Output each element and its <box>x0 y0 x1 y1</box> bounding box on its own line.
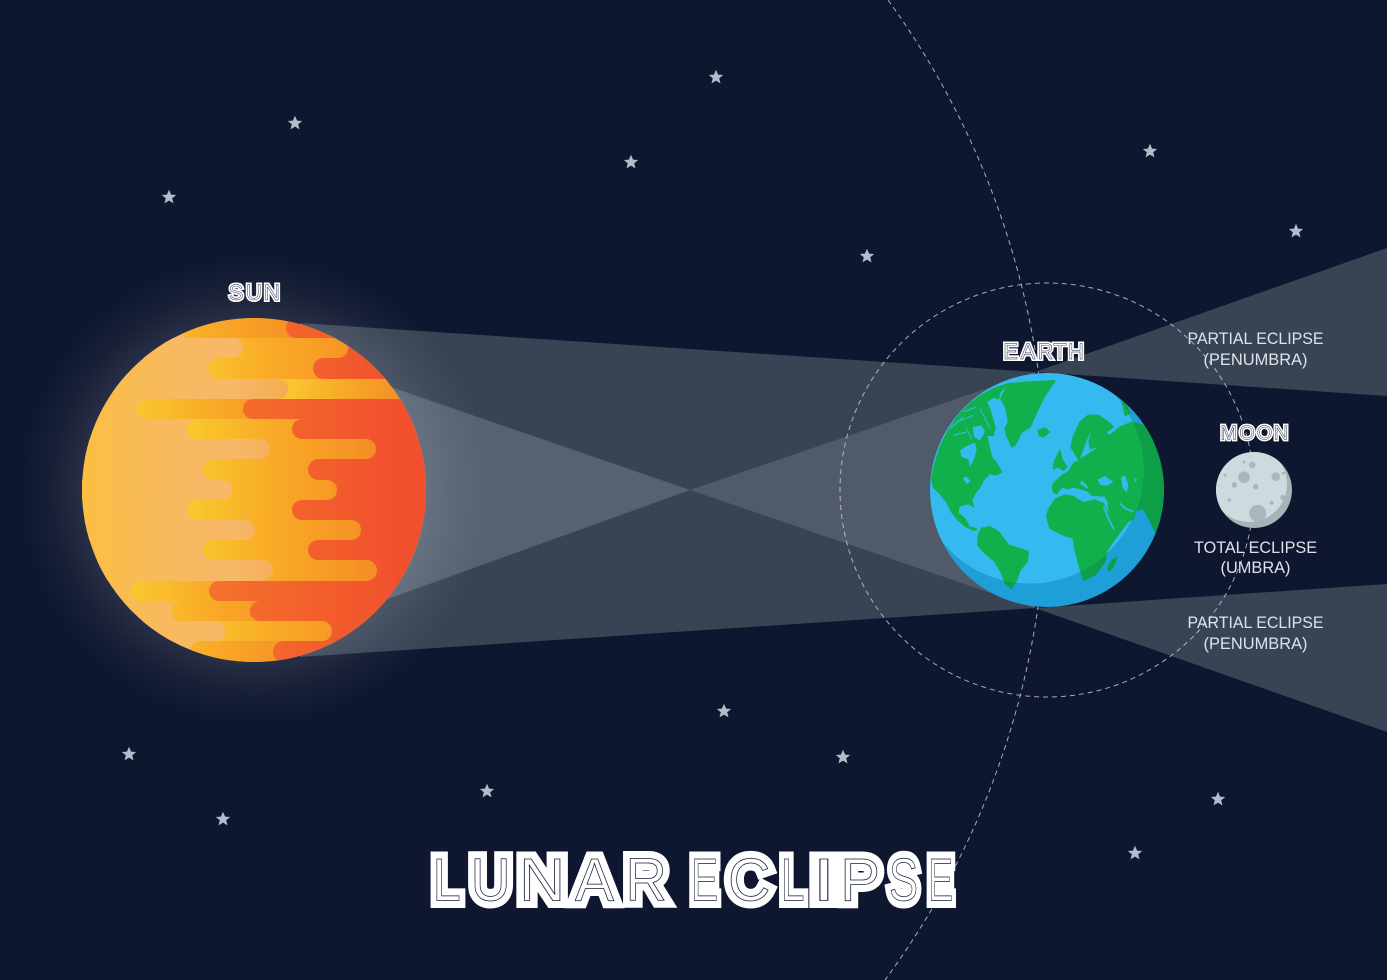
moon <box>1216 452 1292 528</box>
title: C <box>728 846 770 914</box>
dashed earth-moon orbit and sun orbit <box>840 0 1254 980</box>
label: partial eclipse upper: (PENUMBRA) <box>1204 351 1308 369</box>
moon label: MOON <box>1220 422 1288 444</box>
row 16 <box>190 641 336 662</box>
title: I <box>812 846 836 914</box>
stars <box>122 70 1303 859</box>
row 3 <box>108 379 400 399</box>
label: partial eclipse lower <box>1188 614 1324 653</box>
label: total eclipse: TOTAL ECLIPSE <box>1194 539 1317 557</box>
sun <box>82 318 426 662</box>
title: L <box>781 846 804 914</box>
sun label: SUN <box>229 280 280 305</box>
title: L <box>433 846 461 914</box>
title: S <box>889 846 918 914</box>
title: S <box>889 846 918 914</box>
title: C <box>728 846 770 914</box>
earth <box>930 373 1168 607</box>
title: R <box>626 846 667 914</box>
row 11 <box>203 540 418 560</box>
title: L <box>781 846 804 914</box>
sun label: SUN <box>229 280 280 305</box>
row 10 <box>60 520 430 540</box>
title: E <box>928 846 953 914</box>
title: P <box>840 846 880 914</box>
title: U <box>471 846 510 914</box>
row 8 <box>60 480 430 500</box>
light beams: penumbra <box>300 248 1387 732</box>
label: partial eclipse upper <box>1188 330 1324 369</box>
title: I <box>812 846 836 914</box>
sun glow <box>19 255 489 725</box>
title: E <box>928 846 953 914</box>
label: partial eclipse lower: (PENUMBRA) <box>1204 635 1308 653</box>
row 7 <box>203 459 426 480</box>
title <box>433 846 953 914</box>
title: N <box>519 846 565 914</box>
row 6 <box>60 439 430 459</box>
label: partial eclipse lower: PARTIAL ECLIPSE <box>1188 614 1324 632</box>
row 9 <box>187 500 426 520</box>
title: E <box>691 846 718 914</box>
title: N <box>519 846 565 914</box>
row 1 <box>144 338 364 358</box>
title: P <box>840 846 880 914</box>
earth label: EARTH <box>1003 339 1084 364</box>
row 15 <box>142 621 366 641</box>
row 4 <box>138 399 411 419</box>
title: R <box>626 846 667 914</box>
earth label: EARTH <box>1003 339 1084 364</box>
row 14 <box>171 601 386 621</box>
row 0 <box>182 318 334 338</box>
row 5 <box>187 419 418 439</box>
title: L <box>433 846 461 914</box>
moon craters <box>1224 461 1285 522</box>
label: total eclipse <box>1194 539 1317 577</box>
label: total eclipse: (UMBRA) <box>1220 559 1290 577</box>
title: E <box>691 846 718 914</box>
row 2 <box>208 358 386 379</box>
moon label: MOON <box>1220 422 1288 444</box>
row 13 <box>131 581 400 601</box>
title: U <box>471 846 510 914</box>
row 12 <box>96 560 411 581</box>
title: A <box>575 846 614 914</box>
title: A <box>575 846 614 914</box>
label: partial eclipse upper: PARTIAL ECLIPSE <box>1188 330 1324 348</box>
